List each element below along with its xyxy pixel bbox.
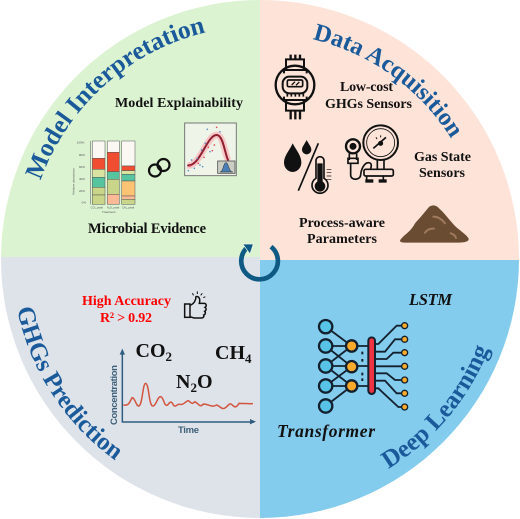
line chart: concentration over time [120,349,256,424]
stacked bar chart: microbial abundance: Treatment [102,210,116,214]
icon: neural network [319,320,408,413]
icon: thumbs up [185,291,206,318]
text: High Accuracy: R² > 0.92 [100,311,152,326]
text: Low-cost GHGs Sensors: Low-cost [340,80,393,95]
icon: soil pile [400,205,469,243]
text: Gas State Sensors [414,150,471,181]
stacked bar chart: microbial abundance: CO₂_peak [91,206,104,210]
text: Low-cost GHGs Sensors [325,80,413,112]
stacked bar chart: microbial abundance: 60% [79,165,85,169]
stacked bar chart: microbial abundance: 80% [79,153,85,157]
icon: wearable sensor [276,55,314,119]
explainability plot [185,123,236,176]
heading: GHGs Prediction: GHGs Prediction [18,308,120,460]
axis label: Concentration: Concentration [109,365,120,425]
stacked bar chart: microbial abundance: CH₄_peak [122,206,135,210]
text: Gas State Sensors: Gas State [414,150,471,165]
stacked bar chart: microbial abundance: Relative abundance [72,168,76,195]
label: CH4: 4 [245,351,252,366]
icon: circular arrow [241,244,278,279]
label: Transformer: Transformer [277,421,375,441]
heading: Deep Learning: Deep Learning [380,344,492,469]
text: Process-aware Parameters: Parameters [307,232,378,247]
text: High Accuracy: High Accuracy [82,294,171,309]
stacked bar chart: microbial abundance: 40% [79,177,85,181]
label: N2O: N [176,371,190,393]
text: Process-aware Parameters [299,216,385,247]
axis label: Time: Time [178,425,199,436]
icon: chain link [149,159,170,176]
text: Microbial Evidence: Microbial Evidence [88,221,207,237]
text: Low-cost GHGs Sensors: GHGs Sensors [325,97,413,112]
stacked bar chart: microbial abundance: 100% [77,140,85,144]
heading: Data Acquisition: Data Acquisition [313,24,459,138]
text: Model Explainability: Model Explainability [115,96,243,111]
stacked bar chart: microbial abundance [72,140,135,214]
text: Process-aware Parameters: Process-aware [299,216,385,231]
label: N2O: 2 [190,380,197,395]
icon: pressure gauge [346,125,398,183]
icon: humidity and thermometer [284,140,331,193]
label: LSTM: LSTM [408,290,453,309]
label: CO2: 2 [166,349,172,364]
label: N2O: O [197,371,213,393]
label: CO2: CO [136,340,166,362]
stacked bar chart: microbial abundance: N₂O_peak [107,206,120,210]
label: CH4: CH [215,342,245,364]
text: High Accuracy [82,294,171,326]
text: Gas State Sensors: Sensors [419,166,466,181]
stacked bar chart: microbial abundance: 20% [79,189,85,193]
stacked bar chart: microbial abundance: 0% [82,201,86,205]
heading: Model Interpretation: Model Interpretation [25,22,206,180]
